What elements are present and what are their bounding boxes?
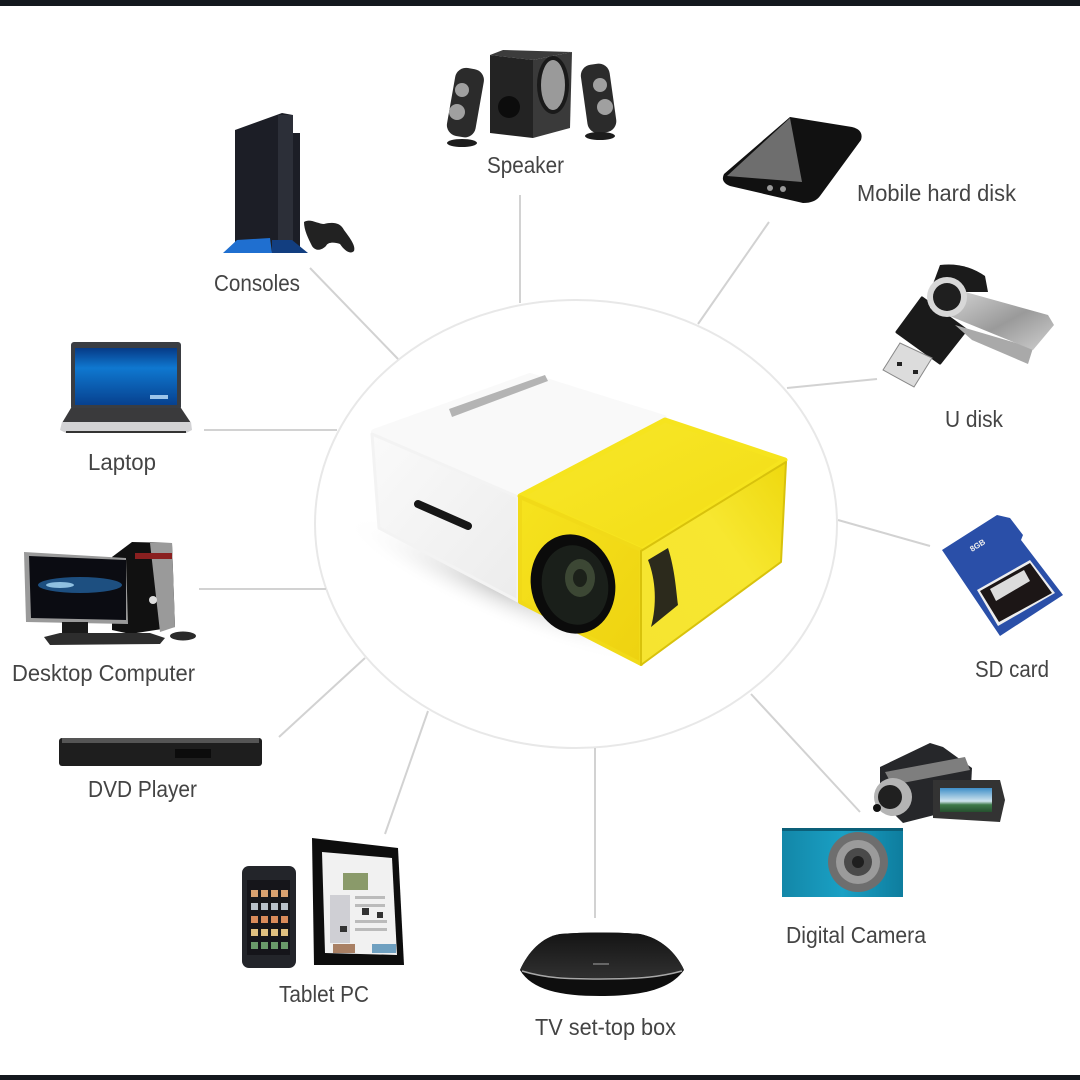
label: mobile hard disk: Mobile hard disk [857,180,1016,206]
item: digital camera [782,743,1005,948]
projector shadow [332,493,668,687]
icon: USB drive [883,264,1054,387]
icon: SD card: 8GB [968,537,987,554]
bottom black border [0,1075,1080,1080]
icon: hard disk [723,117,862,203]
top black border [0,0,1080,6]
icon: smartphone [242,866,296,968]
label: TV set-top box: TV set-top box [535,1014,676,1040]
side slot [418,504,468,526]
label: U disk: U disk [945,406,1003,432]
item: DVD player [59,738,262,802]
item: U disk [883,264,1054,432]
projector [332,375,786,687]
item: TV set-top box [520,932,684,1040]
icon: camcorder [873,743,1005,823]
icon: laptop [60,342,192,433]
lens [522,526,624,642]
icon: set-top box [520,932,684,996]
yellow front [520,497,641,664]
icon: game console [223,113,354,253]
item: consoles [214,113,354,296]
yellow right side [641,462,786,665]
icon: tablet [312,838,404,965]
label: laptop: Laptop [88,449,156,475]
icon: desktop PC [24,542,196,645]
central circle [315,300,837,748]
front recess [648,548,678,627]
icon: compact camera [782,828,903,897]
item: speaker [445,50,618,178]
label: digital camera: Digital Camera [786,922,926,948]
label: consoles: Consoles [214,270,300,296]
item: mobile hard disk [723,117,1016,206]
control strip [449,375,548,417]
icon: SD card [942,515,1063,636]
connector lines [199,195,930,918]
yellow top [520,420,785,550]
icon: speaker [445,50,618,147]
item: tablet PC [242,838,404,1007]
white body top [374,376,664,496]
label: speaker: Speaker [487,152,564,178]
icon: DVD player [59,738,262,766]
item: SD card [942,515,1063,682]
label: desktop computer: Desktop Computer [12,660,195,686]
label: DVD player: DVD Player [88,776,197,802]
item: desktop computer [12,542,196,686]
white body side [372,434,518,601]
label: SD card: SD card [975,656,1049,682]
item: laptop [60,342,192,475]
label: tablet PC: Tablet PC [279,981,369,1007]
